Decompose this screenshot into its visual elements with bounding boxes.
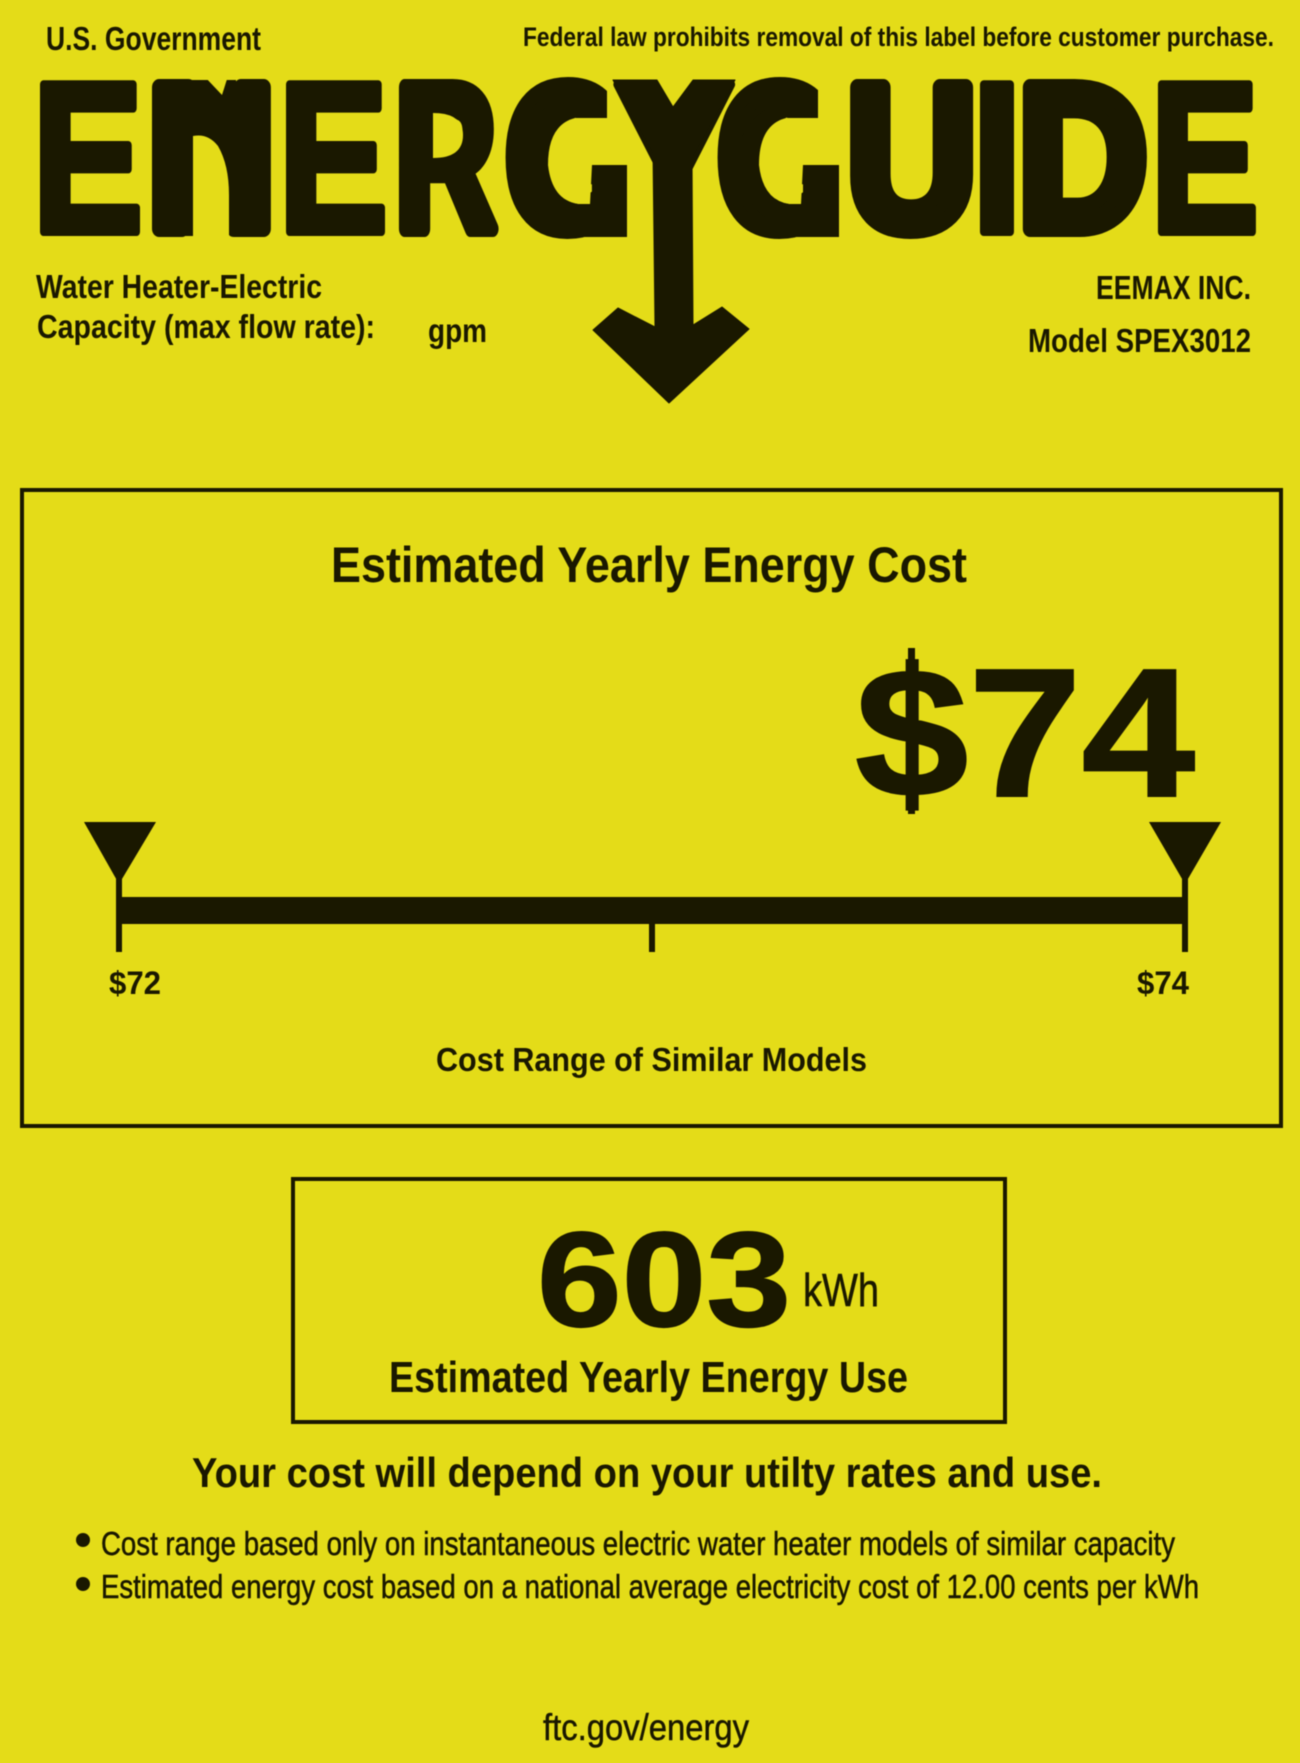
manufacturer: EEMAX INC. <box>1096 269 1251 306</box>
panel: estimated yearly energy cost <box>22 490 1281 1126</box>
cost value: $74 <box>855 630 1195 835</box>
energy use unit: kWh <box>803 1264 879 1316</box>
title: ENERGYGUIDE logotype: E <box>1150 39 1259 278</box>
scale caption: Cost Range of Similar Models <box>436 1041 867 1078</box>
title: ENERGYGUIDE logotype: Y <box>614 38 734 277</box>
title: ENERGYGUIDE logotype: I <box>971 39 1023 278</box>
energy use value: 603 <box>537 1204 791 1355</box>
scale low value: $72 <box>109 965 161 1001</box>
arrow: down arrow extending from the Y <box>593 80 749 403</box>
header: government line: U.S. Government <box>46 20 261 57</box>
panel heading: Estimated Yearly Energy Cost <box>331 537 967 593</box>
scale high value: $74 <box>1137 965 1189 1001</box>
title: ENERGYGUIDE logotype: N <box>147 43 276 273</box>
title: ENERGYGUIDE logotype: G <box>717 43 841 272</box>
title: ENERGYGUIDE logotype: D <box>1018 42 1147 273</box>
capacity label: Capacity (max flow rate): <box>37 308 375 345</box>
statement: cost depends on rates: Your cost will depend on your utilty rates and use. <box>192 1449 1102 1496</box>
bullet list: notes <box>76 1525 1199 1605</box>
panel: estimated yearly energy use <box>293 1179 1005 1422</box>
title: ENERGYGUIDE logotype: G <box>505 43 629 272</box>
title: ENERGYGUIDE logotype <box>32 37 1259 278</box>
cost range scale <box>84 822 1221 952</box>
capacity unit: gpm <box>428 312 487 349</box>
product type: Water Heater-Electric <box>36 268 322 305</box>
energy use caption: Estimated Yearly Energy Use <box>389 1353 908 1402</box>
model number: Model SPEX3012 <box>1028 322 1251 359</box>
title: ENERGYGUIDE logotype: E <box>32 37 143 277</box>
footer: website: ftc.gov/energy <box>543 1707 749 1748</box>
title: ENERGYGUIDE logotype: E <box>278 39 388 278</box>
title: ENERGYGUIDE logotype: U <box>846 44 977 273</box>
title: ENERGYGUIDE logotype: R <box>395 44 496 273</box>
